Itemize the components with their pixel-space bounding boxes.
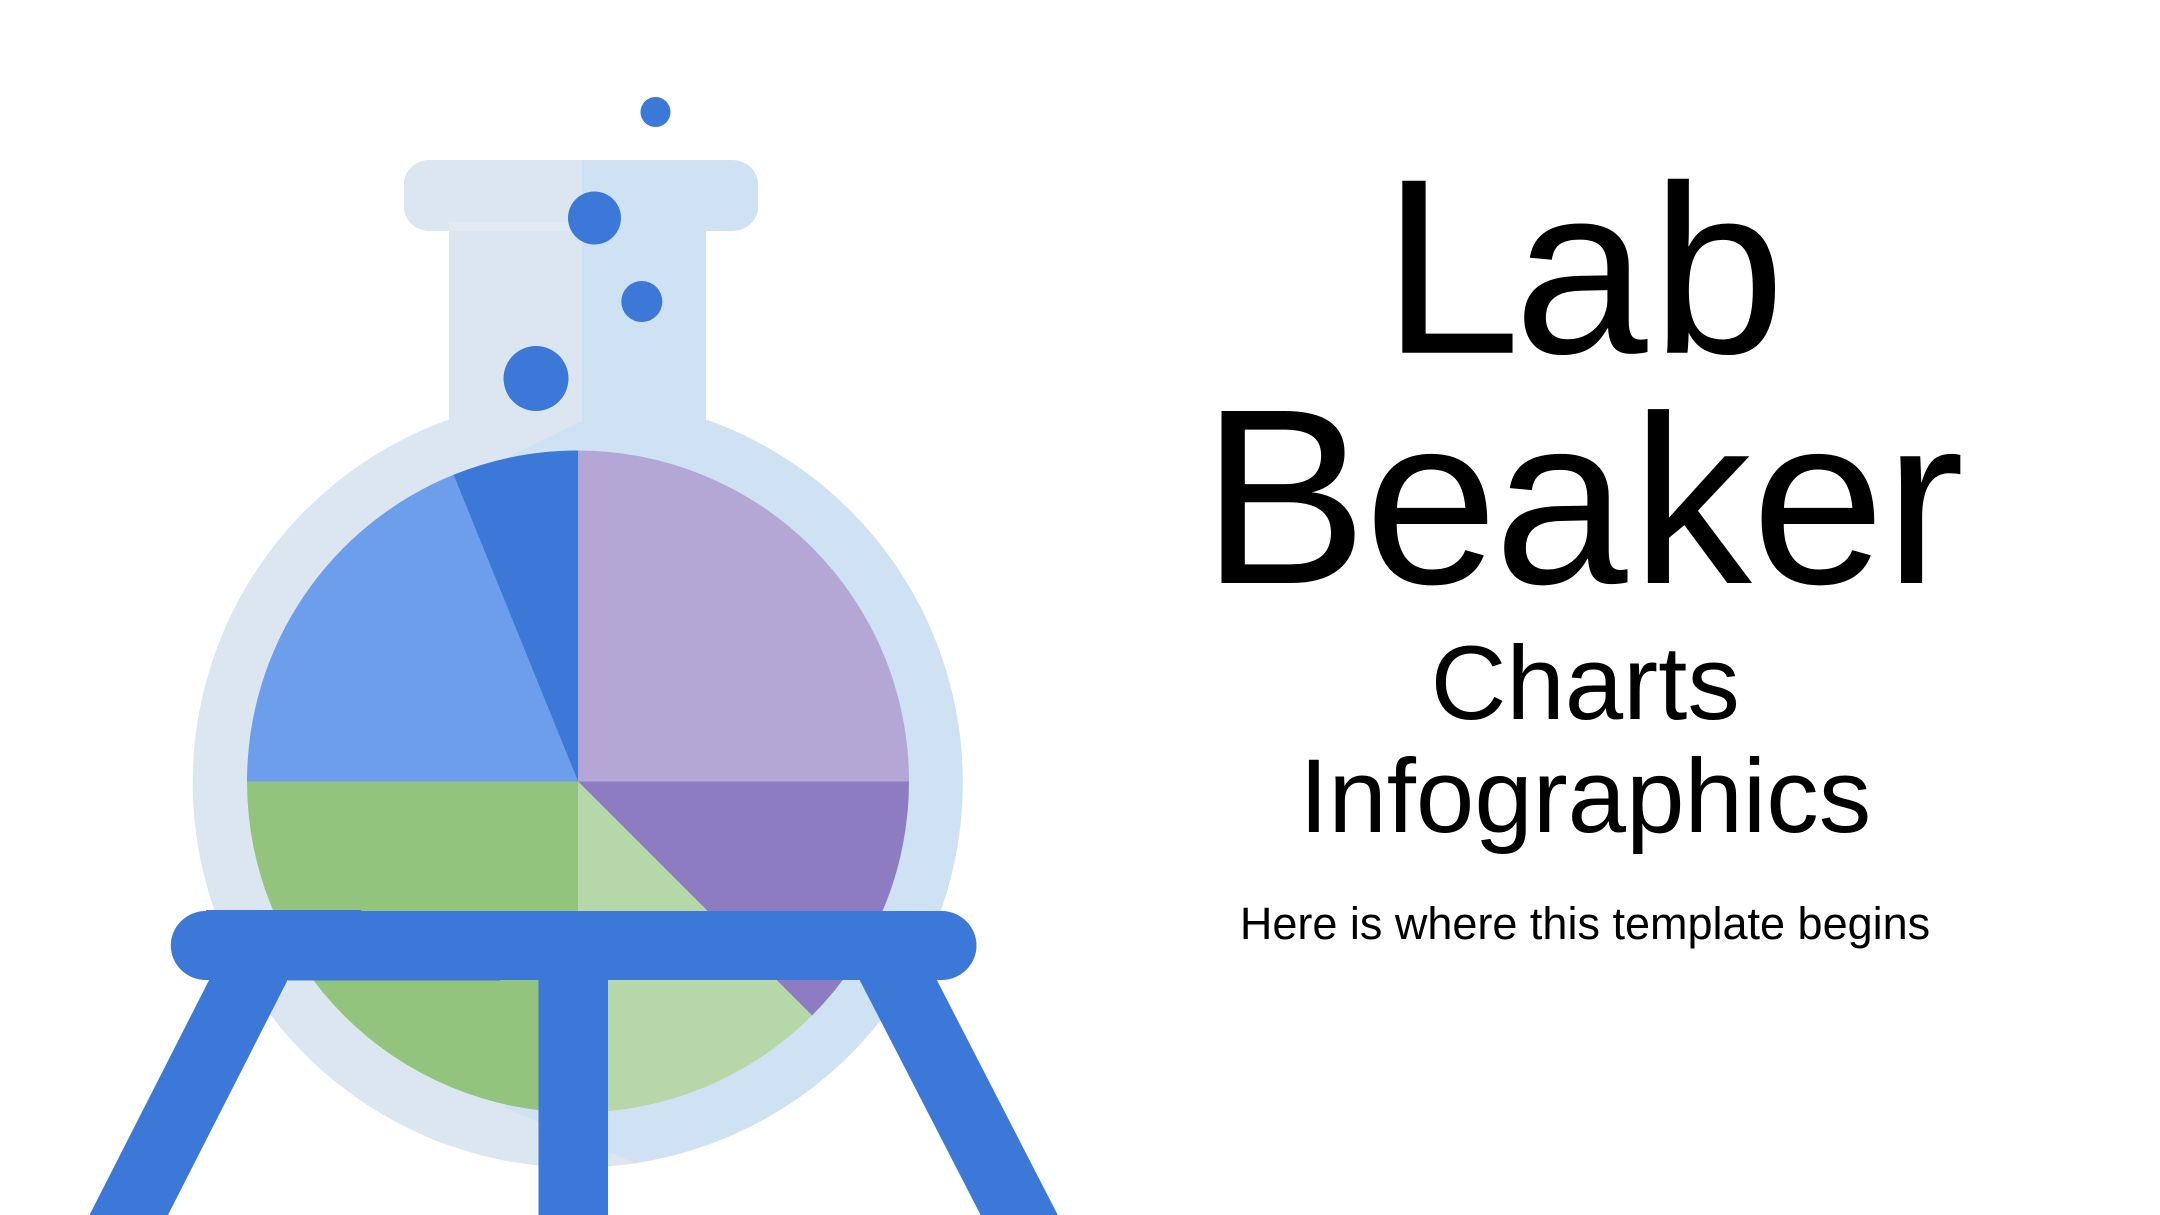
slice: green xyxy=(247,782,578,1112)
stand: center leg xyxy=(538,970,608,1215)
pie chart xyxy=(247,450,909,1112)
slice: blue xyxy=(454,450,578,782)
stand: top bar xyxy=(171,911,977,980)
illustration: lab beaker on stand xyxy=(90,97,1058,1215)
subtitle: charts infographics: Charts xyxy=(1431,625,1740,742)
title: eaker xyxy=(1364,366,1964,634)
title: B xyxy=(1201,357,1368,636)
title: ab xyxy=(1514,136,1785,404)
title: L xyxy=(1382,127,1521,406)
stand: right leg xyxy=(854,970,1058,1215)
bubbles xyxy=(504,97,670,411)
stand: left leg xyxy=(90,970,293,1215)
bubble: top xyxy=(640,97,670,127)
slice: light green xyxy=(578,782,812,1112)
bubble: neck left xyxy=(504,346,568,411)
bubble: neck right xyxy=(621,281,662,322)
tagline: Here is where this template begins xyxy=(1240,898,1930,949)
subtitle: charts infographics xyxy=(1299,625,1871,855)
bubble: lip xyxy=(568,192,621,244)
subtitle: charts infographics: Infographics xyxy=(1299,738,1871,855)
flask body xyxy=(192,160,963,1166)
stand xyxy=(90,910,1058,1215)
slice: dark purple xyxy=(578,782,909,1016)
slice: light purple xyxy=(578,450,909,782)
slice: light blue xyxy=(247,475,578,782)
title xyxy=(1201,127,1964,636)
